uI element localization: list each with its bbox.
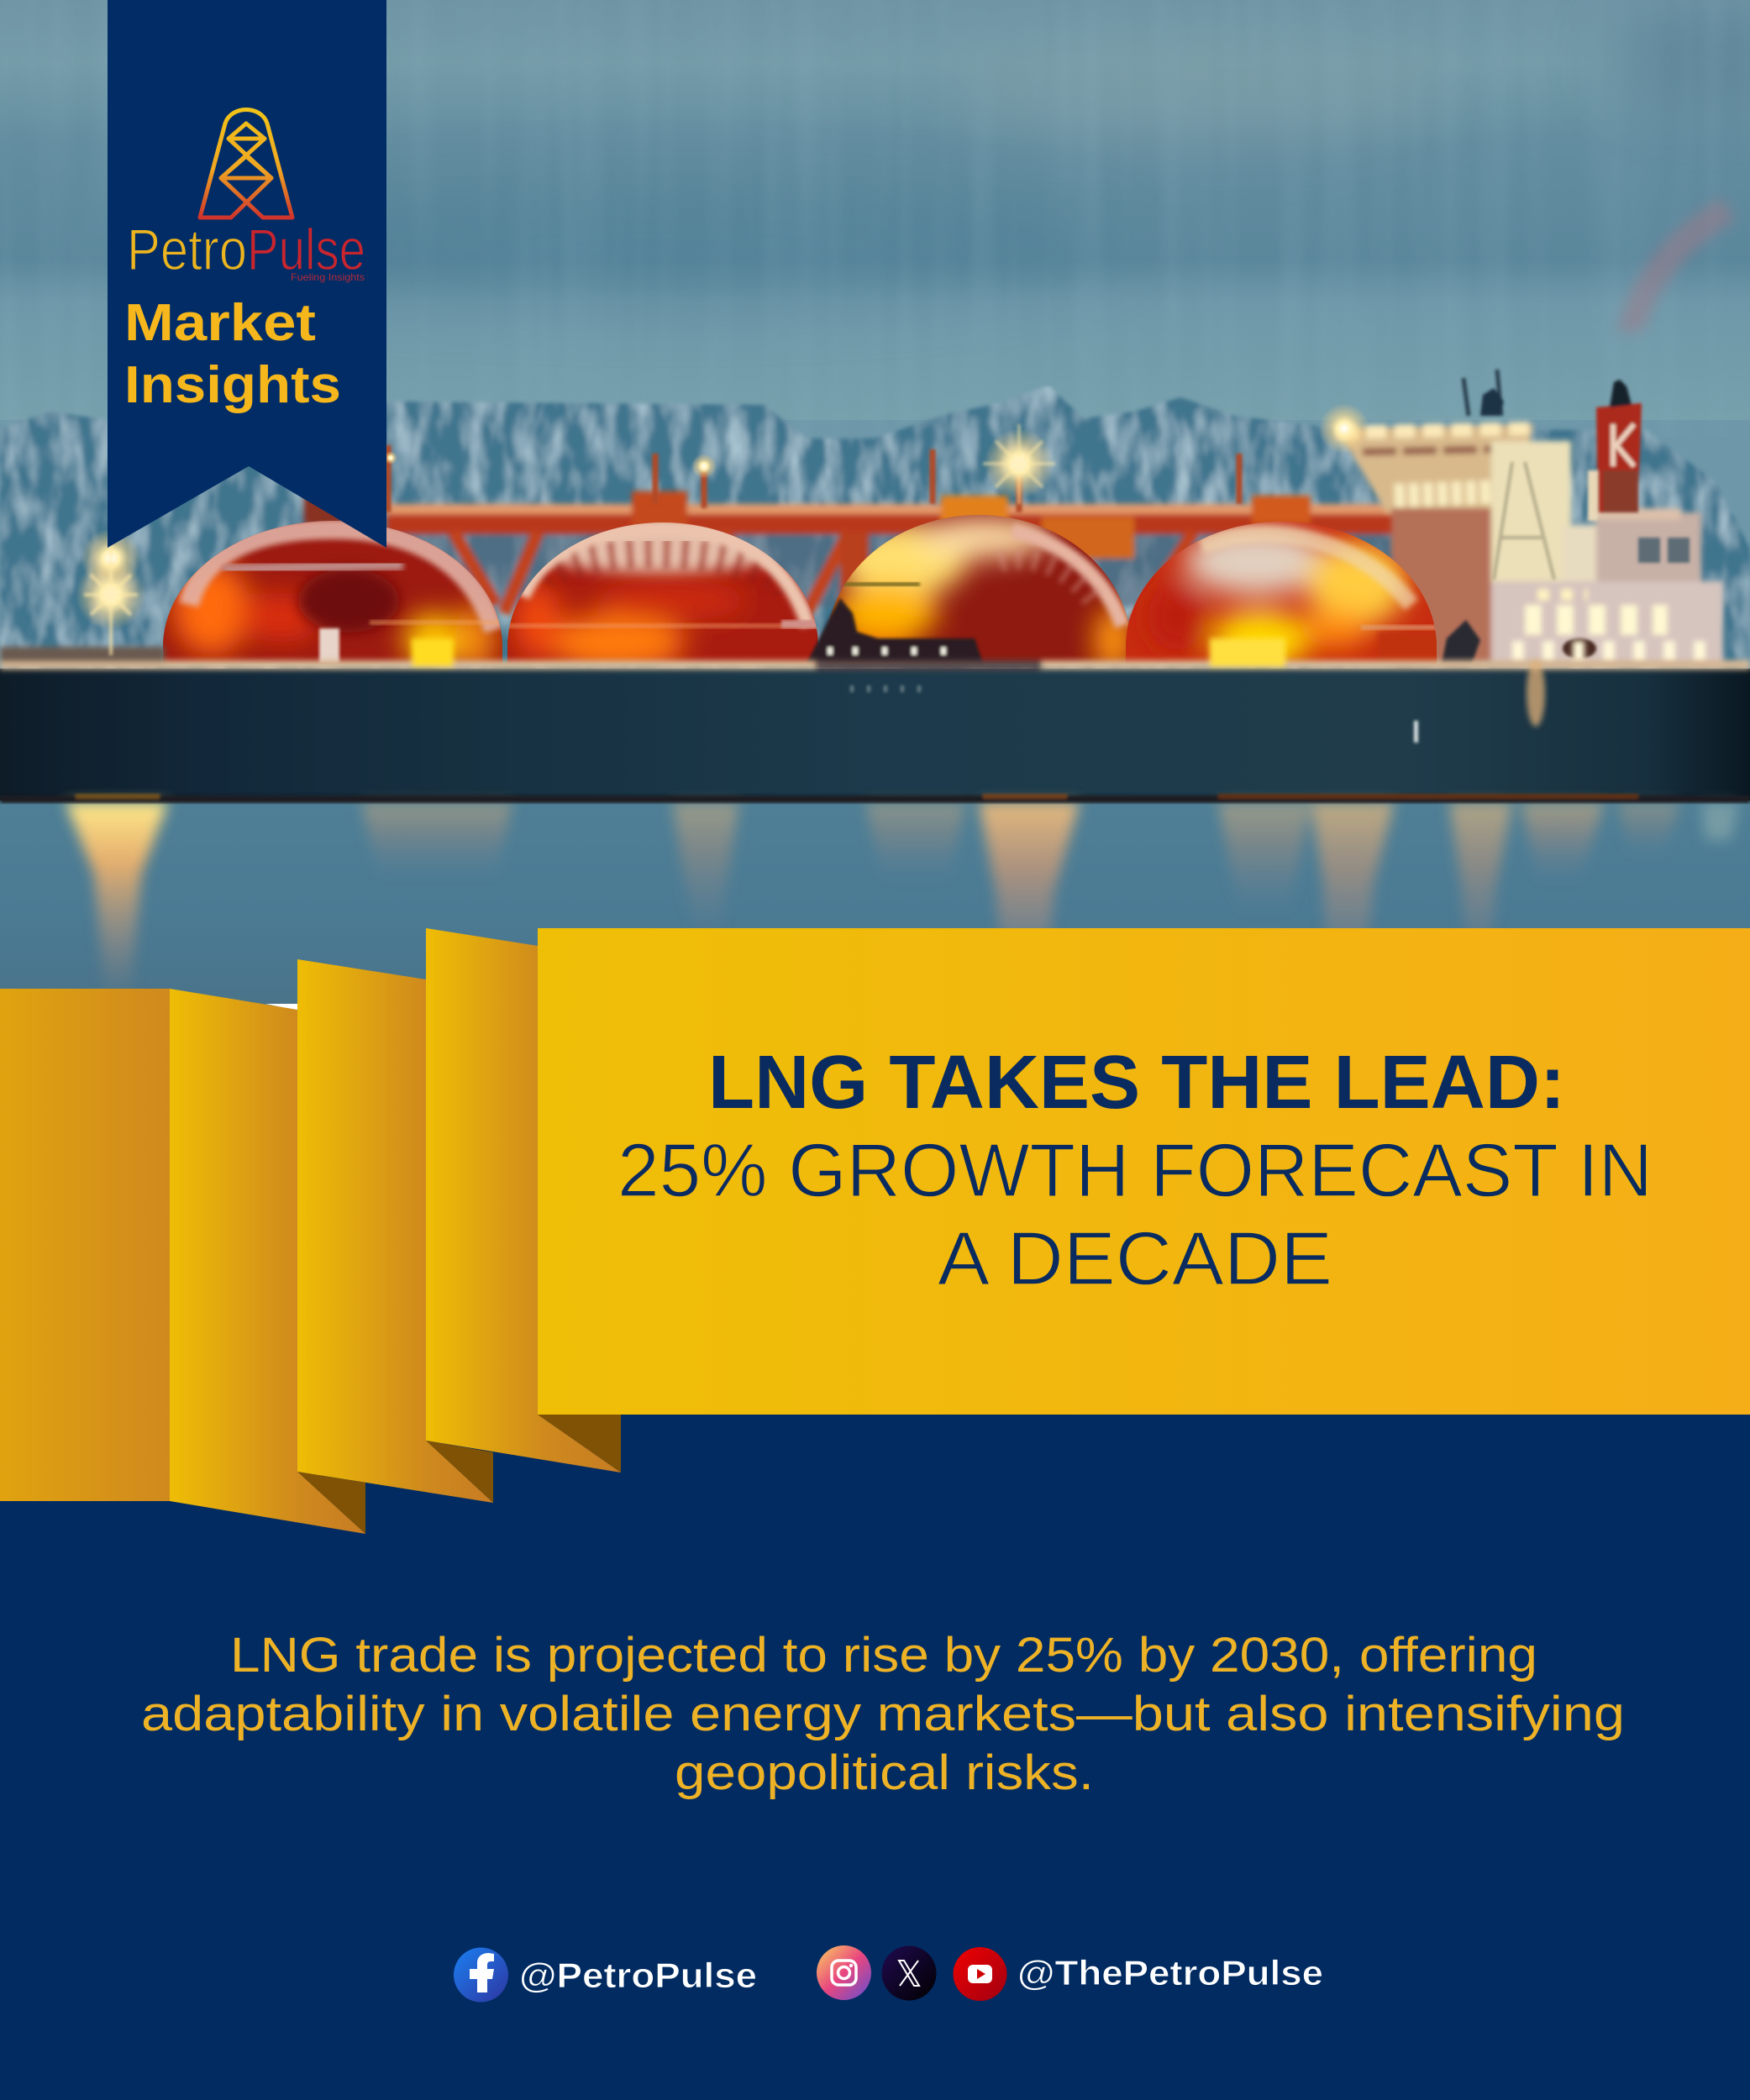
banner ribbon [108, 0, 386, 548]
icon: youtube [953, 1947, 1006, 2001]
tank dome 2 [507, 522, 818, 664]
hull [0, 669, 1750, 801]
folded ribbon [0, 928, 621, 1534]
background navy panel [0, 1000, 1750, 2100]
body paragraph: LNG trade is projected to rise by 25% by 2030, offering [230, 1628, 1537, 1683]
photo: LNG tanker at dusk [0, 0, 1750, 1019]
banner heading: Market [124, 294, 316, 352]
hull small details [850, 689, 1418, 743]
water [0, 801, 1750, 1019]
ribbon fold 4 [426, 928, 621, 1473]
deck light band [0, 638, 1750, 670]
superstructure and funnel [1337, 370, 1723, 665]
tank dome 3 [827, 515, 1128, 664]
tank dome 4 [1126, 522, 1437, 664]
logo icon: derrick tower [200, 109, 292, 218]
title bold line: LNG TAKES THE LEAD: [708, 1041, 1565, 1125]
sky [0, 0, 1750, 672]
deck lamps [76, 403, 1369, 655]
deck masts [388, 445, 1239, 512]
banner heading: Insights [124, 356, 341, 414]
logo wordmark: Petro [127, 217, 247, 282]
waterline [0, 794, 1750, 803]
ribbon fold 3 shadow [426, 1441, 493, 1503]
handle: other networks: @ThePetroPulse [1017, 1953, 1323, 1992]
logo banner [108, 0, 386, 548]
icon: instagram [817, 1945, 871, 2000]
tank dome 1 [163, 521, 502, 664]
white sliver below photo [265, 1004, 297, 1011]
handle: facebook: @PetroPulse [519, 1956, 757, 1995]
banner heading [124, 294, 341, 414]
logo wordmark: Pulse [247, 217, 365, 282]
ribbon fold 3 [297, 959, 493, 1503]
central dark deck equipment [807, 598, 983, 664]
body paragraph [141, 1628, 1625, 1800]
funnel-light reflection on hull [1527, 659, 1545, 727]
mountains [0, 386, 1750, 672]
ribbon fold 1 [0, 989, 170, 1501]
ribbon fold 2 shadow [297, 1472, 365, 1534]
ribbon fold 4 shadow [538, 1415, 621, 1473]
light reflections on water [66, 802, 1739, 1004]
smoke plume [1617, 197, 1736, 332]
panel background [538, 928, 1750, 1415]
title line 2: 25% GROWTH FORECAST IN [617, 1129, 1653, 1213]
body paragraph: geopolitical risks. [675, 1746, 1094, 1800]
ribbon fold 2 [170, 989, 365, 1534]
logo wordmark: Fueling Insights [291, 271, 365, 283]
logo wordmark [127, 217, 365, 283]
body paragraph: adaptability in volatile energy markets—but also intensifying [141, 1687, 1625, 1741]
icon: X [882, 1945, 936, 2001]
gantry and masts [304, 491, 1411, 630]
icon: facebook [454, 1947, 508, 2003]
title line 3: A DECADE [938, 1217, 1332, 1301]
social footer [454, 1945, 1323, 2003]
title panel [538, 928, 1750, 1415]
